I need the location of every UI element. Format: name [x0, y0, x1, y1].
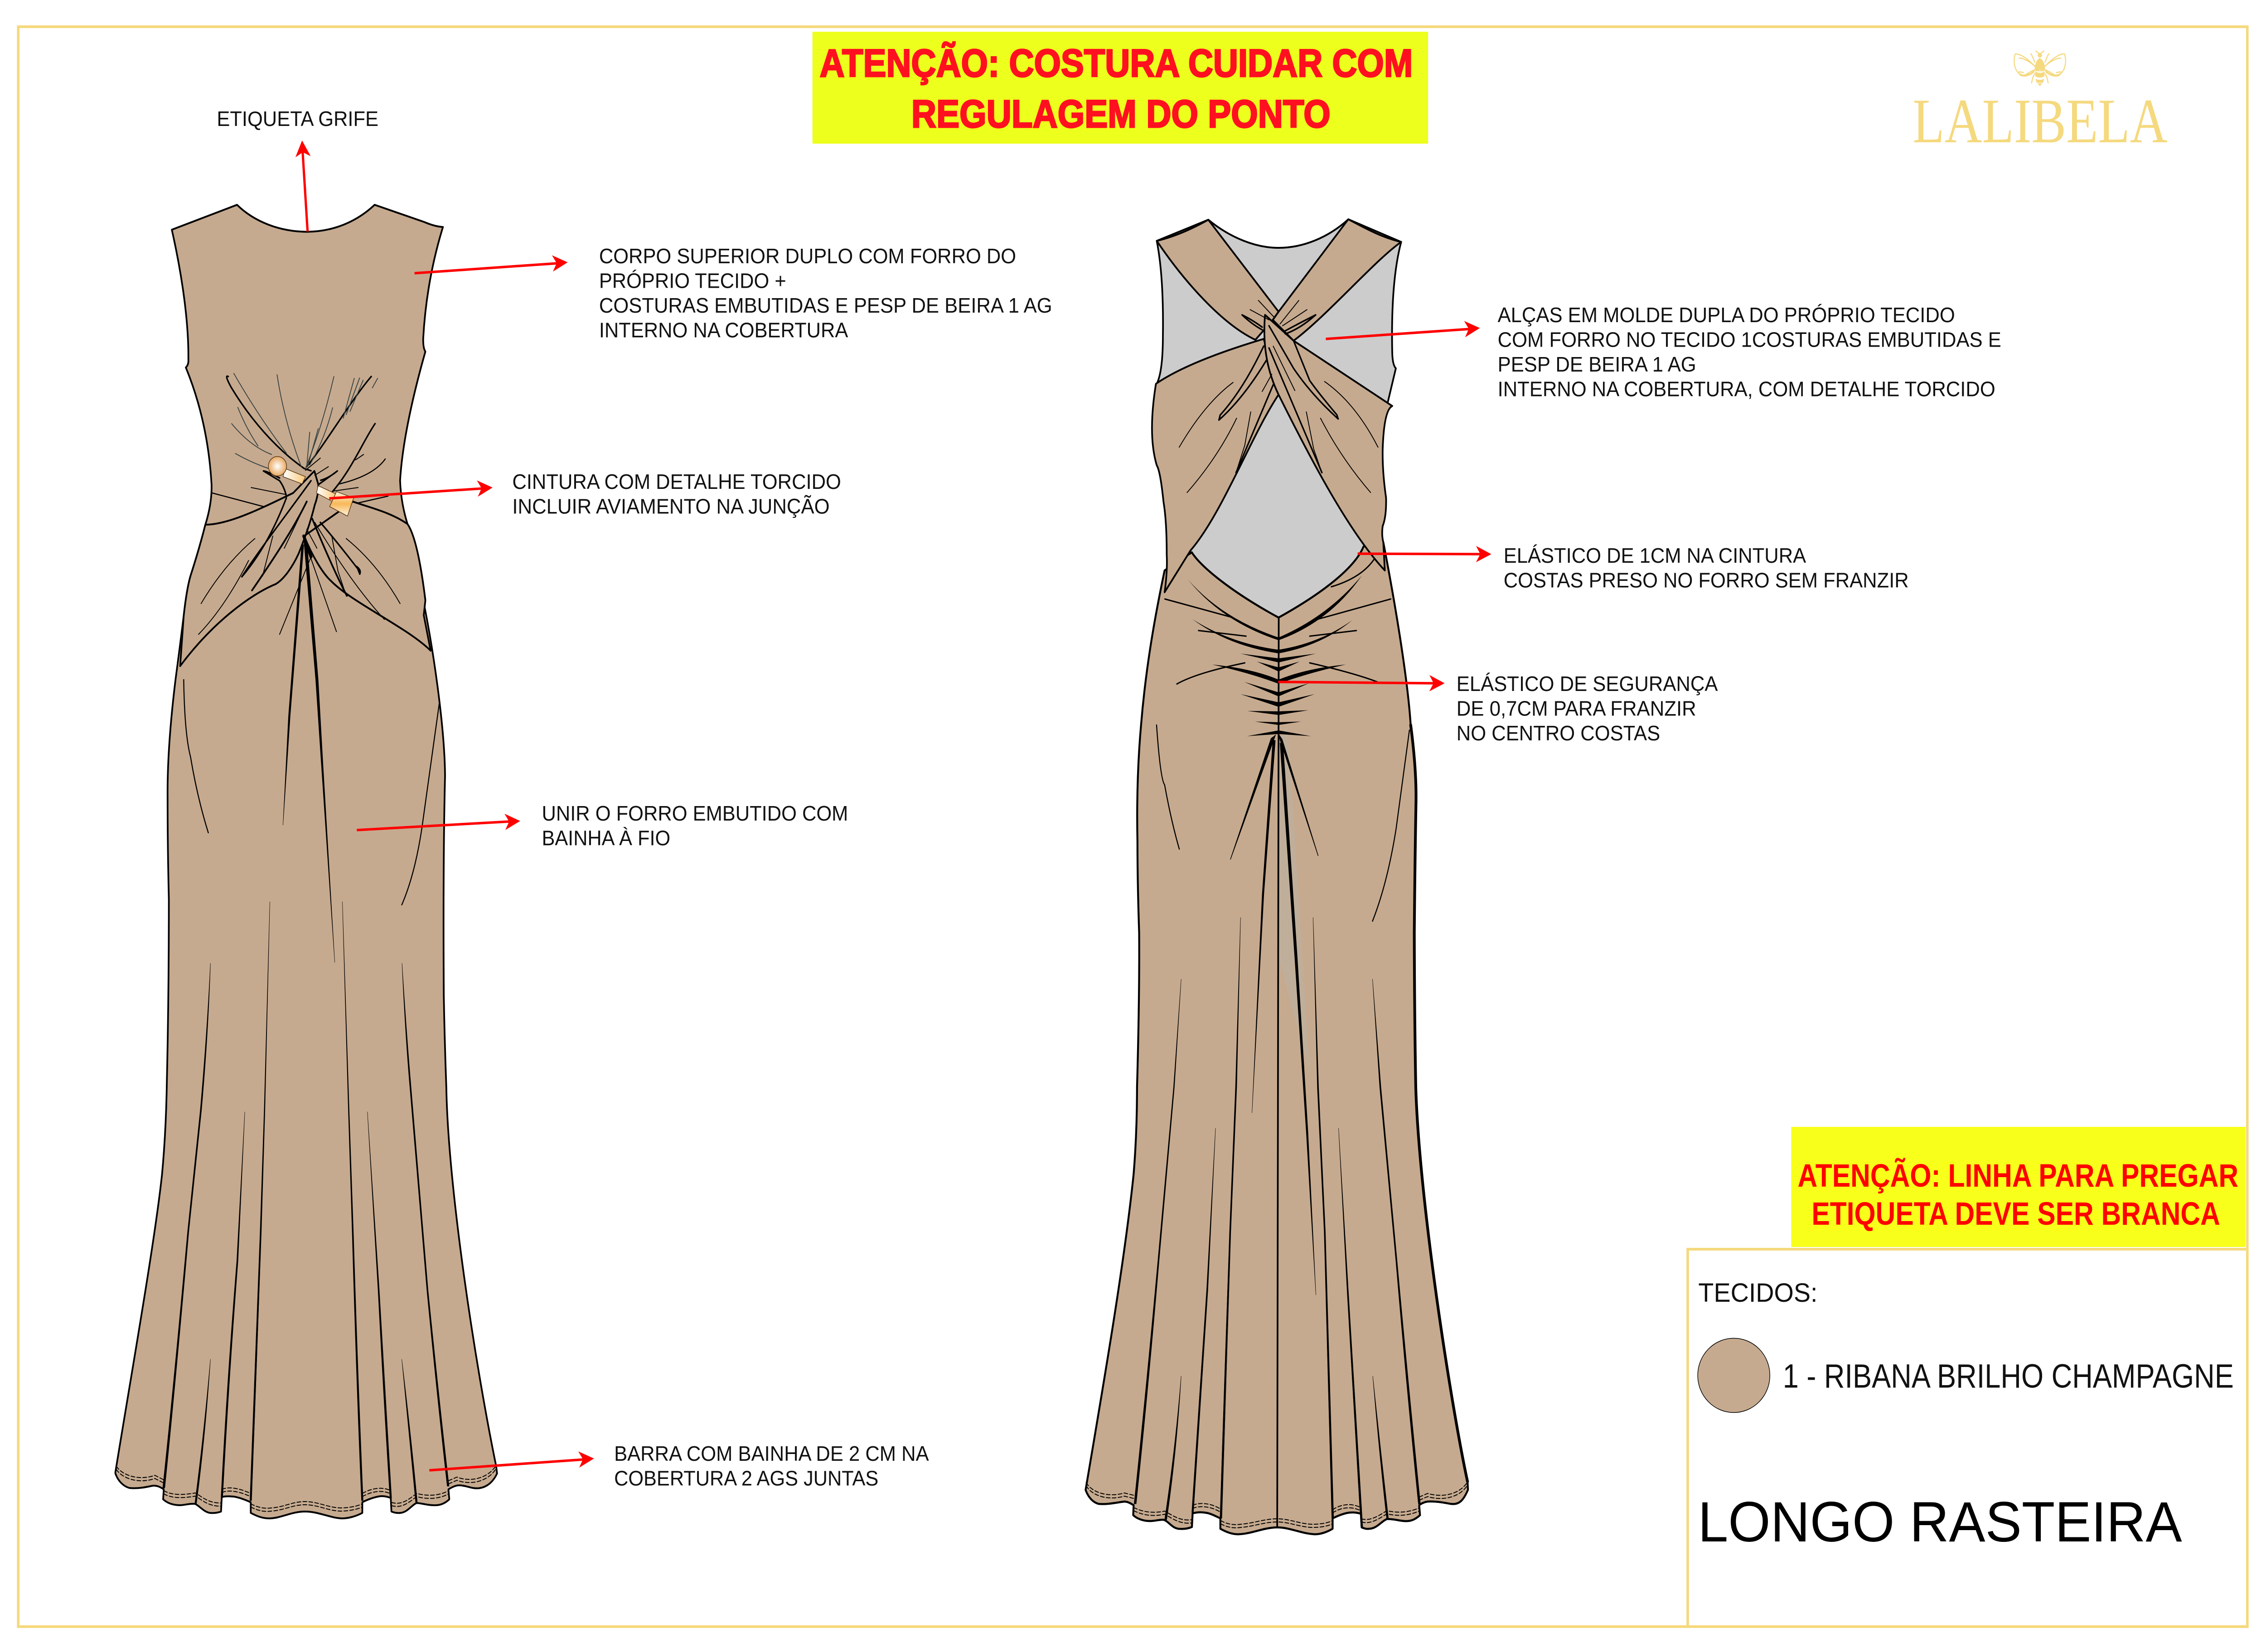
hem stitching: back — [1086, 1483, 1467, 1528]
waist drape: right piece — [304, 502, 431, 651]
label: elástico segurança: ELÁSTICO DE SEGURANÇA — [1457, 673, 1718, 696]
label: cintura: INCLUIR AVIAMENTO NA JUNÇÃO — [512, 495, 830, 518]
heading: tecidos: TECIDOS: — [1698, 1278, 1817, 1307]
label: alças: PESP DE BEIRA 1 AG — [1498, 353, 1696, 376]
dress silhouette: front — [116, 205, 497, 1518]
strap right — [1273, 219, 1401, 341]
arrow: etiqueta grife — [295, 140, 311, 232]
label: alças: ALÇAS EM MOLDE DUPLA DO PRÓPRIO TECIDO — [1498, 304, 1955, 327]
logo: Lalibela with bee — [1913, 51, 2168, 156]
waist drape: left piece and knot — [180, 471, 318, 666]
label: corpo superior: COSTURAS EMBUTIDAS E PESP DE BEIRA 1 AG — [599, 295, 1052, 317]
right edge emphasis: back — [1411, 725, 1467, 1482]
label: unir forro: BAINHA À FIO — [542, 827, 670, 850]
hip lines: back — [1157, 725, 1409, 921]
label: elástico segurança: DE 0,7CM PARA FRANZIR — [1457, 697, 1696, 720]
lining: grey back — [1157, 219, 1401, 618]
title callout: costura — [813, 32, 1428, 144]
arrow: unir forro — [357, 813, 521, 830]
darts: back — [1230, 733, 1318, 860]
label: corpo superior: CORPO SUPERIOR DUPLO COM FORRO DO — [599, 245, 1016, 268]
bodice left — [1152, 339, 1278, 592]
label: corpo superior: INTERNO NA COBERTURA — [599, 319, 848, 342]
highlight strokes: front — [212, 459, 388, 507]
label: elástico segurança — [1457, 673, 1718, 745]
skirt: back — [1085, 542, 1468, 1534]
label: cintura — [512, 471, 841, 518]
hem stitching: front — [116, 1466, 495, 1512]
arrow: elástico segurança — [1278, 675, 1445, 691]
arrow: cintura — [329, 479, 493, 498]
title callout: costura: ATENÇÃO: COSTURA CUIDAR COM — [820, 42, 1413, 85]
fabric name: 1 - RIBANA BRILHO CHAMPAGNE — [1783, 1357, 2234, 1395]
label: cintura: CINTURA COM DETALHE TORCIDO — [512, 471, 841, 493]
label: elástico cintura: COSTAS PRESO NO FORRO SEM FRANZIR — [1504, 569, 1909, 592]
arrow: alças — [1326, 320, 1480, 339]
front view dress — [116, 205, 497, 1518]
gathers: back — [1188, 575, 1362, 736]
bodice right and knot — [1264, 315, 1392, 570]
label: corpo superior — [599, 245, 1052, 342]
callout: linha etiqueta — [1791, 1127, 2246, 1247]
arrow: corpo superior — [415, 254, 568, 273]
model name: LONGO RASTEIRA — [1698, 1490, 2182, 1554]
label: barra: COBERTURA 2 AGS JUNTAS — [614, 1467, 878, 1490]
label: corpo superior: PRÓPRIO TECIDO + — [599, 270, 786, 293]
logo wordmark: LALIBELA — [1913, 86, 2168, 156]
hip lines: front — [184, 680, 440, 905]
arrow: barra — [429, 1450, 595, 1470]
swatch: champagne — [1698, 1338, 1770, 1413]
skirt fold lines: back — [1134, 740, 1420, 1527]
centre back shaded panel — [1279, 725, 1310, 1073]
label: etiqueta grife: ETIQUETA GRIFE — [217, 108, 378, 130]
label: unir forro: UNIR O FORRO EMBUTIDO COM — [542, 802, 848, 825]
label: alças — [1498, 304, 2001, 401]
label: barra — [614, 1443, 929, 1490]
label: elástico segurança: NO CENTRO COSTAS — [1457, 722, 1660, 745]
icon: bee — [2014, 51, 2066, 86]
centre back seam — [1277, 618, 1279, 1527]
knot lines: back — [1179, 300, 1378, 493]
strap left — [1157, 220, 1278, 340]
label: barra: BARRA COM BAINHA DE 2 CM NA — [614, 1443, 929, 1465]
knot lines: front — [199, 373, 400, 634]
trim: bar and bead — [268, 457, 353, 516]
back view dress — [1085, 219, 1468, 1534]
title callout: costura: REGULAGEM DO PONTO — [911, 92, 1331, 136]
skirt fold lines: front — [163, 540, 449, 1504]
label: alças: COM FORRO NO TECIDO 1COSTURAS EMBUTIDAS E — [1498, 328, 2001, 352]
label: unir forro — [542, 802, 848, 850]
label: elástico cintura: ELÁSTICO DE 1CM NA CINTURA — [1504, 545, 1806, 567]
panel: tecidos — [1688, 1249, 2247, 1627]
arrow: elástico cintura — [1358, 546, 1491, 562]
label: elástico cintura — [1504, 545, 1909, 592]
callout: linha etiqueta: ETIQUETA DEVE SER BRANCA — [1811, 1196, 2220, 1232]
label: alças: INTERNO NA COBERTURA, COM DETALHE TORCIDO — [1498, 378, 1995, 401]
highlight strokes: back — [1165, 559, 1391, 684]
